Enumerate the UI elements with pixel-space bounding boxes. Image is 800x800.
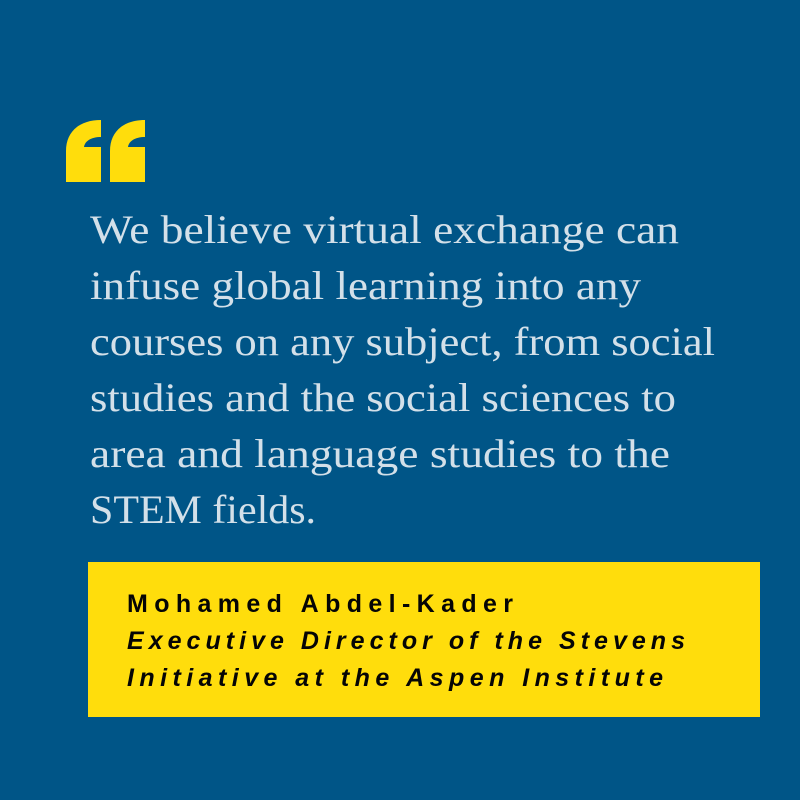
quote text: STEM fields. bbox=[90, 487, 316, 532]
attribution box bbox=[88, 562, 760, 717]
quote text: infuse global learning into any bbox=[90, 263, 641, 308]
quote text: area and language studies to the bbox=[90, 431, 670, 476]
quote text: courses on any subject, from social bbox=[90, 319, 715, 364]
quote text bbox=[90, 207, 715, 532]
icon: quotation mark bbox=[66, 120, 145, 182]
attribution background bbox=[88, 562, 760, 717]
quote text: studies and the social sciences to bbox=[90, 375, 676, 420]
attribution text: Initiative at the Aspen Institute bbox=[127, 664, 663, 692]
quote text: We believe virtual exchange can bbox=[90, 207, 679, 252]
attribution text bbox=[127, 590, 685, 692]
attribution text: Executive Director of the Stevens bbox=[127, 627, 685, 655]
attribution text: Mohamed Abdel-Kader bbox=[127, 590, 513, 618]
